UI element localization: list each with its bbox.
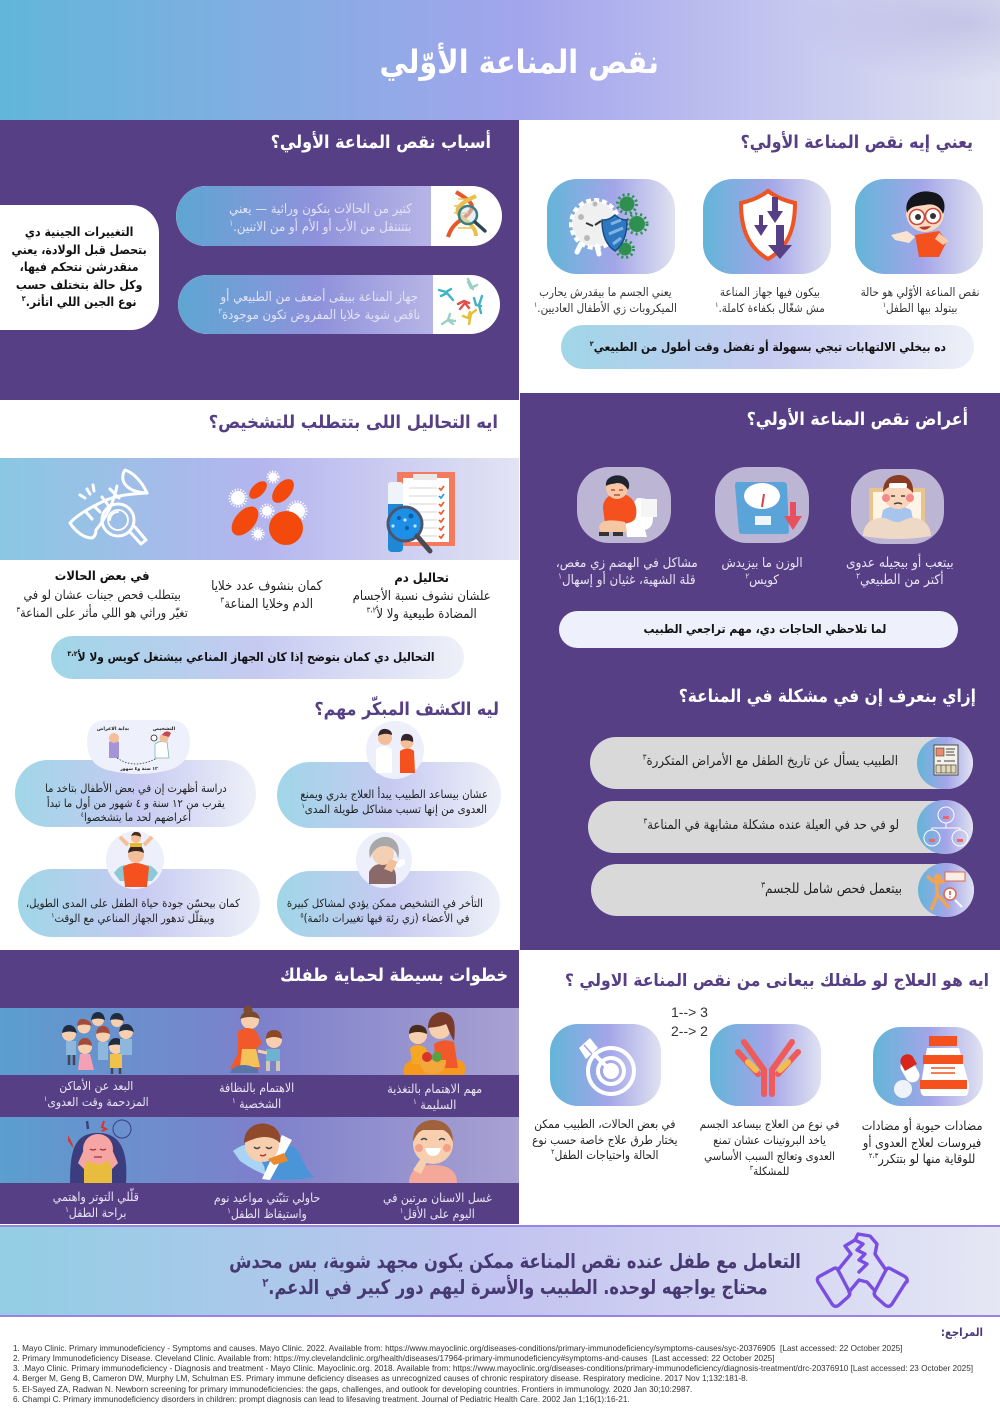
caption: antibody: في نوع من العلاج بيساعد الجسم [700, 1117, 840, 1131]
icon: blood test clipboard [386, 472, 455, 554]
pill: long delay study: يقرب من ١٢ سنة و ٤ شهور من أول ما تبدأ [46, 796, 225, 810]
icon: body exam [918, 863, 974, 917]
row text: family: لو في حد في العيلة عنده مشكلة مشابهة في المناعة٣ [644, 817, 899, 833]
pill: weak immune cells [178, 275, 500, 334]
caption: child: بيتولد بيها الطفل١ [883, 301, 957, 315]
caption: cell count [211, 579, 323, 612]
caption: medication: مضادات حيوية أو مضادات [862, 1118, 982, 1133]
caption: tired [846, 554, 954, 588]
icon: dna magnifier outline [68, 468, 148, 546]
banner text: محتاج يواجهه لوحده. الطبيب والأسرة ليهم دور كبير في الدعم.٢ [262, 1275, 768, 1299]
card: weight scale [715, 467, 809, 543]
caption: antibody: العدوى وتعالج السبب الأساسي [705, 1149, 835, 1163]
caption: crowds: المزدحمة وقت العدوى١ [44, 1094, 148, 1109]
panel: symptoms and how we know [520, 393, 1000, 950]
pill: quality of life: وبيقلّل تدهور الجهاز المناعي مع الوقت١ [51, 911, 215, 925]
icon: stressed mother [68, 1120, 132, 1183]
icon: child brushing teeth [409, 1120, 457, 1183]
pill: quality of life: كمان بيحسّن جودة حياة الطفل على المدى الطويل، [26, 897, 240, 910]
icon: crowd of children [62, 1012, 134, 1074]
caption: tired: بيتعب أو بيجيله عدوى [846, 555, 954, 571]
caption: hygiene: الشخصية ١ [232, 1096, 282, 1111]
pill: long delay study [15, 760, 256, 827]
icon: scale with arrow [735, 482, 802, 534]
caption: target: في بعض الحالات، الطبيب ممكن [534, 1117, 676, 1131]
caption: hygiene [220, 1081, 294, 1111]
icon: antibodies [438, 278, 484, 326]
callout pill: see a doctor: لما تلاحظي الحاجات دي، مهم تراجعي الطبيب [644, 622, 886, 636]
title: نقص المناعة الأوّلي [379, 43, 659, 81]
band: row two [0, 1117, 519, 1183]
row: full exam [591, 864, 974, 916]
row text: exam: بيتعمل فحص شامل للجسم٣ [761, 880, 902, 897]
caption: medication [842, 1118, 1000, 1168]
caption: digestion: قلة الشهية، غثيان أو إسهال١ [558, 572, 696, 588]
icon: shield with arrows [739, 188, 797, 262]
card: shield [703, 179, 831, 274]
caption: stress: قلّلي التوتر واهتمي [53, 1190, 139, 1204]
panel: causes [0, 120, 519, 400]
callout: genetic changes: نوع الجين اللي اتأثر.٢ [22, 294, 137, 309]
diagram: symptom to diagnosis timeline: التشخيص [153, 726, 175, 732]
icon: sleeping child [233, 1124, 314, 1180]
caption: tired: أكتر من الطبيعي٢ [856, 570, 944, 588]
card: tired in bed [851, 469, 944, 544]
diagram: symptom to diagnosis timeline [87, 720, 190, 774]
references list: 5. El-Sayed ZA, Radwan N. Newborn screening for primary immunodeficiencies: the gaps, challenges, and outlook for developing countries. Frontiers in immunology. 2020 Jan 30;10:2987. [13, 1385, 692, 1394]
icon: blood cells [228, 470, 308, 545]
record sheet [934, 744, 958, 776]
caption: antibody: للمشكلة٣ [750, 1164, 790, 1178]
caption: blood test: المضادة طبيعية ولا لأ٣،٢ [367, 606, 477, 622]
pill: delay organ damage: في الأعضاء (زي رئة فيها تغييرات دائمة)٥ [301, 911, 470, 925]
pill text: hereditary: بتتنتقل من الأب أو الأم أو من الاتنين.١ [229, 219, 411, 235]
card: cell fights viruses [547, 179, 675, 274]
references list: 6. Champi C. Primary immunodeficiency disorders in children: prompt diagnosis can lead to lifesaving treatment. Journal of Pediatric Health Care. 2002 Jan 1;16(1):16-21. [13, 1395, 630, 1404]
row: history [590, 737, 973, 789]
note: reorder numbers: 2--> 2 [671, 1023, 708, 1039]
heading: what is: يعني إيه نقص المناعة الأولي؟ [741, 132, 973, 153]
diagram: symptom to diagnosis timeline: بداية الاعراض [97, 726, 129, 732]
band: row one [0, 1008, 519, 1075]
caption: stress: براحة الطفل١ [65, 1205, 127, 1220]
caption: crowds: البعد عن الأماكن [59, 1079, 133, 1093]
pill text: hereditary: كتير من الحالات بتكون وراثية — يعني [229, 202, 411, 217]
references list: 4. Berger M, Geng B, Cameron DW, Murphy LM, Schulman ES. Primary immune deficiency diseases as unrecognized causes of chronic respiratory disease. Respiratory medicine. 2017 Nov 1;132:181-8. [13, 1374, 748, 1383]
icon: target [576, 1035, 638, 1097]
pill: early treatment [277, 762, 501, 828]
pill: early treatment: عشان بيساعد الطبيب يبدأ العلاج بدري ويمنع [300, 787, 488, 801]
panel: diagnosis tests [0, 400, 519, 690]
banner text: التعامل مع طفل عنده نقص المناعة ممكن يكون مجهد شوية، بس محدش [229, 1249, 801, 1273]
caption: genetic test: تغيّر وراثي هو اللي مأثر على المناعة٣ [16, 605, 188, 620]
caption: shield: بيكون فيها جهاز المناعة [720, 285, 820, 299]
caption: sleep [177, 1190, 357, 1223]
card: digestion [577, 467, 671, 543]
icon: coughing elder [356, 832, 412, 888]
caption: nutrition: مهم الاهتمام بالتغذية [388, 1081, 482, 1096]
caption: antibody [680, 1117, 860, 1181]
heading: causes: أسباب نقص المناعة الأولي؟ [271, 132, 491, 153]
pill: hereditary [176, 186, 502, 246]
caption: medication: للوقاية منها لو بتتكرر٢،٣ [869, 1151, 975, 1166]
caption: cell count: الدم وخلايا المناعة٣ [221, 596, 313, 612]
caption: cell: يعني الجسم ما بيقدرش يحارب [539, 285, 671, 299]
caption: weight [721, 556, 803, 588]
callout: genetic changes: بتحصل قبل الولادة، يعني [12, 242, 147, 256]
panel: protection steps [0, 950, 519, 1224]
pill: delay organ damage: التأخر في التشخيص ممكن يؤدي لمشاكل كبيرة [287, 897, 483, 910]
caption: cell: الميكروبات زي الأطفال العاديين.١ [534, 301, 676, 315]
note: reorder numbers: 1--> 3 [671, 1004, 708, 1020]
caption: blood test: علشان نشوف نسبة الأجسام [353, 589, 491, 604]
family tree drawing [924, 806, 968, 846]
card: child [855, 179, 983, 274]
icon: antibody [734, 1036, 802, 1098]
icon: mother and child hygiene [230, 1006, 282, 1073]
references list: 3. .Mayo Clinic. Primary immunodeficiency - Diagnosis and treatment - Mayo Clinic. Mayoclinic.org. 2018. Available from: https://www.mayoclinic.org/diseases-conditions/primary-immunodeficiency/diagnosis-treatment/drc-20376910 [Last accessed: 23 October 2025] [13, 1364, 973, 1373]
banner text [215, 1248, 815, 1300]
caption: blood test: تحاليل دم [395, 571, 449, 586]
pill: quality of life [18, 869, 260, 937]
callout pill: see a doctor [559, 611, 958, 648]
row: family [588, 801, 973, 853]
caption: teeth [357, 1190, 517, 1223]
caption: antibody: ياخد البروتينات عشان تمنع [714, 1133, 826, 1147]
pill: early treatment: العدوى من إنها تسبب مشاكل طويلة المدى١ [301, 802, 487, 816]
row text: history: الطبيب يسأل عن تاريخ الطفل مع الأمراض المتكررة٣ [643, 753, 898, 769]
icon: boy with glasses [891, 191, 949, 257]
note: reorder numbers [671, 1003, 721, 1041]
header banner [0, 0, 1000, 120]
caption: shield: مش شغّال بكفاءة كاملة.١ [715, 301, 825, 315]
heading: symptoms: أعراض نقص المناعة الأولي؟ [747, 409, 968, 430]
panel: why early detection [0, 690, 519, 950]
icon: father and child [106, 831, 164, 889]
panel: what is PID [520, 120, 1000, 393]
caption: weight: الوزن ما بيزيدش [721, 556, 803, 571]
heading: how we know: إزاي بنعرف إن في مشكلة في المناعة؟ [679, 686, 976, 707]
pill: long delay study: أعراضهم لحد ما يتشخصوا٤ [80, 810, 191, 824]
card: antibody [710, 1024, 821, 1106]
icon: feeding child [404, 1012, 466, 1075]
caption: hygiene: الاهتمام بالنظافة [220, 1081, 294, 1095]
caption: shield [715, 285, 825, 315]
diagram: symptom to diagnosis timeline: ١٢ سنة و٤ شهور [119, 766, 158, 772]
caption: nutrition: السليمة ١ [413, 1097, 457, 1112]
icon: pills and bottle [887, 1035, 969, 1097]
caption: sleep: حاولي تثبّتي مواعيد نوم [214, 1191, 320, 1205]
heading: early detection: ليه الكشف المبكّر مهم؟ [314, 699, 499, 720]
caption: blood test [353, 571, 491, 622]
heading: treatment: ايه هو العلاج لو طفلك بيعانى من نقص المناعة الاولي ؟ [565, 971, 989, 991]
card: target [550, 1024, 661, 1106]
exam figure [926, 872, 966, 910]
callout: genetic changes: التغييرات الجينية دي [25, 225, 134, 239]
caption: digestion [556, 556, 698, 588]
caption: child [861, 285, 979, 315]
pill text: weak cells: جهاز المناعة بيبقى أضعف من الطبيعي أو [221, 290, 418, 305]
references list [13, 1344, 998, 1405]
caption: genetic test [16, 569, 188, 620]
caption: crowds [44, 1078, 148, 1109]
icon: cell with shield and viruses [569, 193, 648, 259]
caption: digestion: مشاكل في الهضم زي مغص، [556, 556, 698, 571]
closing banner [0, 1225, 1000, 1317]
caption: teeth: اليوم على الأقل١ [400, 1206, 474, 1221]
pill text: weak cells: ناقص شوية خلايا المفروض تكون موجودة٢ [218, 307, 421, 323]
caption: stress [16, 1189, 176, 1222]
icon: family tree [917, 800, 973, 854]
references [0, 1320, 1000, 1415]
callout: genetic changes: منقدرشن نتحكم فيها، [20, 260, 139, 274]
pill: delay organ damage [277, 871, 500, 937]
callout: genetic changes [0, 205, 159, 330]
caption: target: الحالة واحتياجات الطفل٢ [551, 1147, 659, 1162]
pill: long delay study: دراسة أظهرت إن في بعض الأطفال بتاخد ما [45, 782, 226, 795]
pill text: hereditary [176, 186, 431, 246]
caption: nutrition [388, 1081, 482, 1112]
callout pill: infections [561, 325, 974, 369]
references list: 2. Primary Immunodeficiency Disease. Cleveland Clinic. Available from: https://my.clevelandclinic.org/health/diseases/17964-primary-immunodeficiency#symptoms-and-causes [Last accessed: 22 October 2025] [13, 1354, 774, 1363]
panel: treatment [520, 950, 1000, 1224]
caption: cell [534, 285, 676, 315]
icon: child on toilet [599, 475, 657, 537]
caption: genetic test: في بعض الحالات [55, 569, 149, 584]
icon: sick child in bed [863, 475, 931, 539]
callout: genetic changes: وكل حالة بتختلف حسب [16, 278, 143, 292]
caption: target: يختار طرق علاج خاصة حسب نوع [532, 1132, 678, 1146]
heading: tests: ايه التحاليل اللى بتتطلب للتشخيص؟ [209, 412, 498, 433]
references heading: المراجع: [941, 1325, 983, 1339]
caption: sleep: واستيقاظ الطفل١ [227, 1206, 307, 1221]
card: medication [873, 1027, 983, 1106]
caption: target [520, 1117, 690, 1164]
heading: protection: خطوات بسيطة لحماية طفلك [280, 965, 508, 986]
band: tests icons [0, 458, 519, 560]
pill text: weak cells [178, 275, 433, 334]
icon: medical record [917, 737, 973, 789]
callout pill: tests show [51, 636, 464, 679]
icon: doctor and patient [366, 721, 424, 779]
caption: cell count: كمان بنشوف عدد خلايا [211, 579, 323, 594]
caption: medication: فيروسات لعلاج العدوى أو [863, 1134, 981, 1150]
caption: genetic test: بيتطلب فحص جينات عشان لو في [23, 587, 181, 602]
caption: teeth: غسل الاسنان مرتين في [383, 1191, 491, 1205]
caption: weight: كويس٢ [745, 572, 779, 588]
caption: child: نقص المناعة الأوّلي هو حالة [861, 285, 979, 299]
icon: dna magnifier [446, 190, 487, 238]
callout pill: infections: ده بيخلي الالتهابات تيجي بسهولة أو تفضل وقت أطول من الطبيعي٢ [589, 339, 946, 354]
icon: clasped hands [815, 1232, 909, 1312]
callout pill: tests show: التحاليل دي كمان بتوضح إذا كان الجهاز المناعي بيشتغل كويس ولا لأ٣،٢ [67, 649, 435, 664]
references list: 1. Mayo Clinic. Primary immunodeficiency - Symptoms and causes. Mayo Clinic. 2022. Available from: https://www.mayoclinic.org/diseases-conditions/primary-immunodeficiency/symptoms-causes/syc-20376905 [Last accessed: 22 October 2025] [13, 1344, 902, 1353]
